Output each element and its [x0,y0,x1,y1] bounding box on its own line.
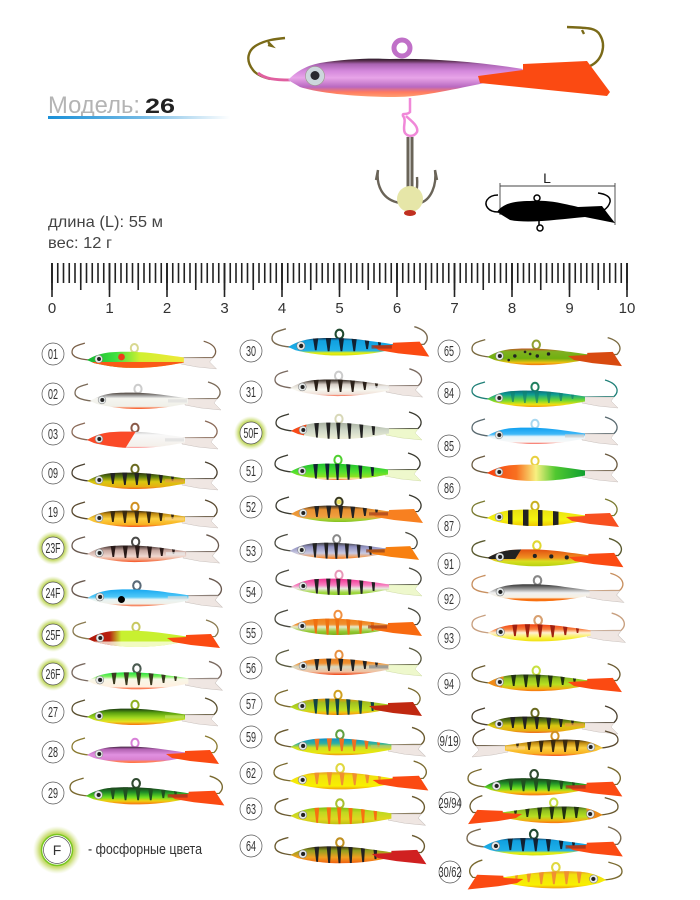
ruler: 7 [450,300,459,317]
color 93: 93 [444,630,454,647]
tail [478,61,610,96]
color 52 [240,495,423,523]
color 31: 31 [246,384,256,401]
color 62: 62 [246,765,256,782]
color 94: 94 [444,676,454,693]
color 50F: 50F [244,425,258,442]
color 86 [438,454,618,499]
color 53 [240,532,419,562]
color 56 [240,648,422,679]
ruler: 1 [105,300,114,317]
color 57 [240,688,422,716]
color 91: 91 [444,556,454,573]
color 87: 87 [444,518,454,535]
color 30 [240,327,429,362]
color 87 [438,499,619,537]
color 91 [438,538,623,575]
main lure photo: model 26 [248,27,610,216]
color 31 [240,369,422,403]
color 57: 57 [246,696,256,713]
ruler: 4 [278,300,286,317]
color 54: 54 [246,584,256,601]
color 09: 09 [48,465,58,482]
color 85 [438,417,618,457]
body [288,59,523,97]
ruler: 6 [393,300,401,317]
color 54 [240,568,422,603]
bead [397,186,423,216]
color 19: 19 [48,504,58,521]
color 64 [240,835,426,864]
ruler [48,273,635,317]
color 63 [240,796,425,825]
color 52: 52 [246,499,256,516]
model heading [48,92,230,119]
color 27: 27 [48,704,58,721]
color 55 [240,608,422,644]
color 51 [240,453,421,482]
color 28: 28 [48,744,58,761]
color 84 [438,380,618,408]
ruler: 2 [163,300,171,317]
eye [306,66,324,86]
color 50F [234,412,422,450]
color 84: 84 [444,385,454,402]
color 29 [42,776,224,805]
ruler: 0 [48,300,56,317]
combo 29/94: 29/94 [438,795,462,812]
color 01: 01 [48,346,58,363]
color 19 [42,500,218,528]
color 23F [36,531,219,565]
specs text [48,214,163,252]
silhouette diagram with length L [486,170,615,231]
right hook [567,27,603,66]
color 65 [438,338,622,366]
color 03: 03 [48,426,58,443]
legend: phosphor colors: F [53,842,61,858]
color 02: 02 [48,386,58,403]
color 27 [42,698,218,726]
color 59: 59 [246,729,256,746]
color 30: 30 [246,343,256,360]
color 65: 65 [444,343,454,360]
color 28 [42,736,219,764]
color 24F: 24F [46,585,60,602]
model heading: 26 [145,95,175,118]
ruler: 9 [565,300,574,317]
color 25F: 25F [46,627,60,644]
color 59 [240,726,425,756]
color 92 [438,573,624,610]
color 03 [42,421,218,452]
color 94 [438,664,622,695]
color 85: 85 [444,438,454,455]
combo 30/62 [438,827,623,889]
combo 9/19: 9/19 [440,733,458,750]
color 23F: 23F [46,540,60,557]
color 64: 64 [246,838,256,855]
combo 29/94 [438,767,622,827]
combo 9/19 [438,706,618,757]
ruler: 3 [220,300,229,317]
silhouette diagram with length L: L [543,170,551,186]
ruler: 8 [508,300,516,317]
treble hook [376,137,437,203]
combo 30/62: 30/62 [438,864,462,881]
model heading: Модель: [48,92,140,119]
color 26F [36,657,222,691]
color 09 [42,462,218,490]
legend: phosphor colors: - фосфорные цвета [88,841,203,858]
color 62 [240,761,428,790]
color 55: 55 [246,625,256,642]
ruler: 5 [335,300,344,317]
color 02 [42,382,221,410]
color 53: 53 [246,543,256,560]
specs text: вес: 12 г [48,235,112,252]
color 26F: 26F [46,666,60,683]
color 24F [36,576,222,610]
specs text: длина (L): 55 м [48,214,163,231]
color 92: 92 [444,591,454,608]
eyelet [394,40,410,56]
color 93 [438,613,625,649]
column 3 [438,338,625,889]
left hook [248,38,285,79]
color 25F [36,618,220,652]
color 01 [42,341,217,372]
color 51: 51 [246,463,256,480]
legend: phosphor colors [33,826,203,874]
ruler: 10 [619,300,635,317]
color 29: 29 [48,785,58,802]
color 56: 56 [246,660,256,677]
column 1 [36,341,224,805]
link [403,98,417,136]
color 63: 63 [246,801,256,818]
color 86: 86 [444,480,454,497]
column 2 [234,327,429,864]
